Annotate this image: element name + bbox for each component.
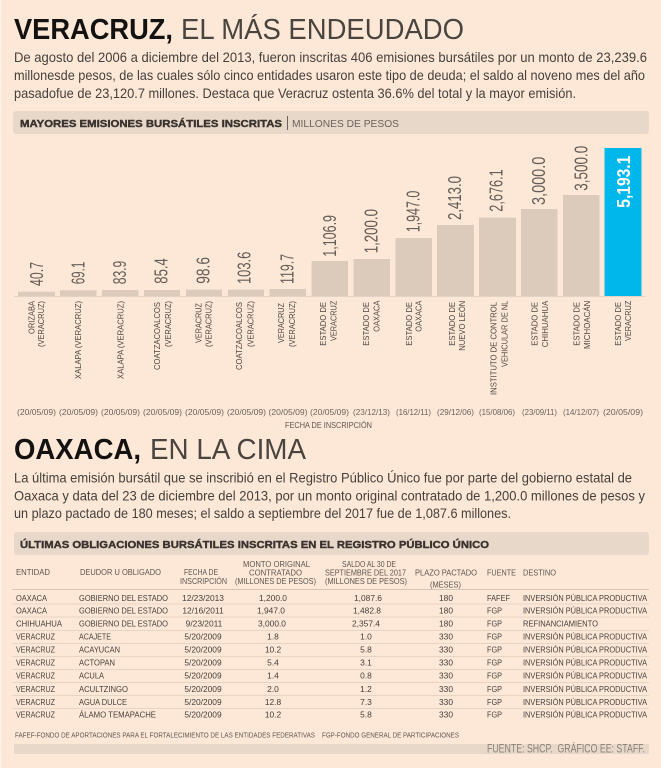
column: Estado de Oaxaca 1,200.0: ESTADO DE <box>361 302 371 346</box>
row: Oaxaca 2011: GOBIERNO DEL ESTADO <box>79 606 168 616</box>
row: Acayucan: ACAYUCAN <box>79 645 120 655</box>
row: Álamo Temapache <box>16 710 647 720</box>
row: Chihuahua: FGP <box>487 619 502 629</box>
row: Oaxaca 2013: 12/23/2013 <box>182 593 224 603</box>
chart heading band: MILLONES DE PESOS <box>292 119 399 130</box>
row: Oaxaca 2013: 180 <box>439 593 453 603</box>
row: Acula: ACULA <box>79 671 104 681</box>
row: Álamo Temapache: VERACRUZ <box>16 710 55 720</box>
column: Estado de Veracruz 1,106.9: ESTADO DE <box>318 302 328 346</box>
row: Acajete: 1.8 <box>267 632 279 642</box>
column: Estado de Oaxaca 1,200.0: (23/12/13) <box>353 407 390 417</box>
column: Veracruz 98.6 <box>185 257 224 417</box>
column: Coatzacoalcos 103.6: (20/05/09) <box>227 407 266 417</box>
row: Álamo Temapache: 5/20/2009 <box>184 710 222 720</box>
column: Estado de Veracruz 5,193.1 highlighted: (20/05/09) <box>603 407 643 417</box>
row: Oaxaca 2013: FAFEF <box>487 593 510 603</box>
row: Acayucan: 10.2 <box>265 645 281 655</box>
column: Estado de Veracruz 5,193.1 highlighted: VERACRUZ <box>623 301 633 341</box>
table header row <box>16 560 556 590</box>
row: Oaxaca 2011: OAXACA <box>16 606 47 616</box>
row: Oaxaca 2011: 12/16/2011 <box>182 606 224 616</box>
column: Veracruz 98.6: (20/05/09) <box>185 407 224 417</box>
table: obligaciones bursátiles <box>12 560 649 720</box>
column: Veracruz 98.6: (VERACRUZ) <box>204 301 214 347</box>
row: Oaxaca 2013 <box>16 593 647 603</box>
axis caption: fecha de inscripción: FECHA DE INSCRIPCIÓN <box>285 420 372 430</box>
column: Xalapa 83.9: 83.9 <box>110 261 130 284</box>
row: Agua Dulce: INVERSIÓN PÚBLICA PRODUCTIVA <box>523 697 647 707</box>
column: Estado de Chihuahua 3,000.0 <box>521 157 558 417</box>
column: Instituto de Control Vehicular de NL 2,676.1: 2,676.1 <box>487 169 507 212</box>
row: Acajete <box>16 632 647 642</box>
column: Xalapa 83.9: (20/05/09) <box>101 407 140 417</box>
table header row: CONTRATADO <box>249 568 302 578</box>
row: Álamo Temapache: INVERSIÓN PÚBLICA PRODUCTIVA <box>523 710 647 720</box>
row: Actopan: 330 <box>439 658 453 668</box>
row: Chihuahua <box>16 619 598 629</box>
column: Estado de Michoacán 3,500.0: ESTADO DE <box>572 302 582 346</box>
column: Estado de Veracruz 1,106.9: VERACRUZ <box>328 301 338 341</box>
row: Oaxaca 2011: 1,482.8 <box>353 606 381 616</box>
table header row: ENTIDAD <box>16 568 50 577</box>
row: Álamo Temapache: 5.8 <box>360 710 372 720</box>
row: Chihuahua: CHIHUAHUA <box>16 619 62 629</box>
row: Acultzingo <box>16 684 647 694</box>
column: Estado de Nuevo León 2,413.0 <box>437 176 474 417</box>
intro text block: Oaxaca <box>14 470 645 521</box>
footnote: acronyms: FGP-FONDO GENERAL DE PARTICIPACIONES <box>322 730 459 740</box>
row: Acajete: VERACRUZ <box>16 632 55 642</box>
column: Estado de Michoacán 3,500.0 <box>563 146 600 417</box>
column: Veracruz 119.7: 119.7 <box>277 254 297 284</box>
title: Oaxaca: EN LA CIMA <box>150 434 307 466</box>
table header row: DEUDOR U OBLIGADO <box>80 568 161 577</box>
column: Orizaba 40.7 <box>17 262 56 417</box>
column: Veracruz 119.7: (VERACRUZ) <box>287 301 297 347</box>
column: Instituto de Control Vehicular de NL 2,676.1: VEHICULAR DE NL <box>500 300 510 367</box>
chart heading band: MAYORES EMISIONES BURSÁTILES INSCRITAS <box>20 117 282 130</box>
row: Acajete: 5/20/2009 <box>184 632 222 642</box>
row: Agua Dulce: FGP <box>487 697 502 707</box>
column: Xalapa 69.1: (20/05/09) <box>59 407 98 417</box>
row: Oaxaca 2013: GOBIERNO DEL ESTADO <box>79 593 168 603</box>
row: Acayucan: INVERSIÓN PÚBLICA PRODUCTIVA <box>523 645 647 655</box>
row: Acultzingo: 330 <box>439 684 453 694</box>
table header row: (MILLONES DE PESOS) <box>235 577 316 586</box>
row: Oaxaca 2013: 1,087.6 <box>354 593 382 603</box>
column: Veracruz 98.6: VERACRUZ <box>194 303 204 343</box>
column: Instituto de Control Vehicular de NL 2,676.1: (15/08/06) <box>479 407 515 417</box>
column: Coatzacoalcos 85.4: COATZACOALCOS <box>152 302 162 370</box>
row: Álamo Temapache: 330 <box>439 710 453 720</box>
row: Acula: 0.8 <box>360 671 372 681</box>
row: Acajete: 330 <box>439 632 453 642</box>
row: Acayucan: 5.8 <box>360 645 372 655</box>
table header row: FUENTE <box>487 568 516 578</box>
row: Actopan: ACTOPAN <box>79 658 115 668</box>
column: Estado de Veracruz 1,106.9: 1,106.9 <box>320 215 340 257</box>
column: Xalapa 83.9 <box>101 261 140 417</box>
table header row: (MILLONES DE PESOS) <box>325 577 407 586</box>
row: Actopan: 3.1 <box>360 658 372 668</box>
row: Oaxaca 2011: INVERSIÓN PÚBLICA PRODUCTIVA <box>523 606 647 616</box>
table header row: INSCRIPCIÓN <box>180 576 227 586</box>
column: Estado de Chihuahua 3,000.0: 3,000.0 <box>529 157 549 205</box>
row: Acultzingo: 5/20/2009 <box>184 684 222 694</box>
column: Coatzacoalcos 103.6: 103.6 <box>235 252 255 284</box>
row: Actopan: INVERSIÓN PÚBLICA PRODUCTIVA <box>523 658 647 668</box>
column: Estado de Veracruz 1,106.9 <box>310 215 349 417</box>
column: Estado de Nuevo León 2,413.0: 2,413.0 <box>445 176 465 220</box>
row: Oaxaca 2011: FGP <box>487 606 502 616</box>
row: Acultzingo: 1.2 <box>360 684 372 694</box>
column: Estado de Nuevo León 2,413.0: NUEVO LEÓN <box>457 301 467 351</box>
row: Acula: 5/20/2009 <box>184 671 222 681</box>
title: Veracruz: EL MÁS ENDEUDADO <box>181 13 464 46</box>
row: Acayucan <box>16 645 647 655</box>
column: Estado de Michoacán 3,500.0: (14/12/07) <box>563 407 599 417</box>
column: Orizaba 40.7: (VERACRUZ) <box>36 301 46 347</box>
row: Actopan: 5/20/2009 <box>184 658 222 668</box>
column: Orizaba 40.7: (20/05/09) <box>17 407 56 417</box>
row: Oaxaca 2011: 180 <box>439 606 453 616</box>
column: Coatzacoalcos 103.6: (VERACRUZ) <box>246 301 256 347</box>
column: Xalapa 83.9: XALAPA (VERACRUZ) <box>116 301 126 379</box>
intro text block: Oaxaca: un plazo pactado de 180 meses; el saldo a septiembre del 2017 fue de 1,087.6 millones. <box>14 505 511 521</box>
row: Acajete: INVERSIÓN PÚBLICA PRODUCTIVA <box>523 632 647 642</box>
row: Agua Dulce: AGUA DULCE <box>79 697 127 707</box>
column: Estado de Oaxaca 1,947.0: OAXACA <box>414 300 424 332</box>
row: Agua Dulce: 330 <box>439 697 453 707</box>
chart heading band <box>13 111 649 134</box>
row: Chihuahua: 3,000.0 <box>258 619 286 629</box>
column: Estado de Oaxaca 1,200.0: OAXACA <box>371 300 381 332</box>
row: Álamo Temapache: ÁLAMO TEMAPACHE <box>79 710 156 720</box>
title: Veracruz: VERACRUZ, <box>14 14 173 46</box>
title: Oaxaca: OAXACA, <box>14 434 141 466</box>
row: Acayucan: 330 <box>439 645 453 655</box>
row: Oaxaca 2011: 1,947.0 <box>257 606 285 616</box>
column: Coatzacoalcos 85.4: 85.4 <box>152 258 172 284</box>
column: Instituto de Control Vehicular de NL 2,676.1 <box>479 169 516 417</box>
column: Estado de Oaxaca 1,947.0: 1,947.0 <box>403 191 423 232</box>
row: Acultzingo: ACULTZINGO <box>79 684 129 694</box>
table header row: PLAZO PACTADO <box>415 568 477 578</box>
column: Estado de Chihuahua 3,000.0: (23/09/11) <box>522 407 557 417</box>
row: Álamo Temapache: 10.2 <box>265 710 281 720</box>
column: Estado de Michoacán 3,500.0: 3,500.0 <box>571 146 591 191</box>
table heading band <box>14 532 649 555</box>
row: Acultzingo: FGP <box>487 684 502 694</box>
row: Chihuahua: 9/23/2011 <box>186 619 223 629</box>
row: Oaxaca 2013: INVERSIÓN PÚBLICA PRODUCTIVA <box>523 593 647 603</box>
column: Veracruz 119.7: (20/05/09) <box>268 407 308 417</box>
table heading band: ÚLTIMAS OBLIGACIONES BURSÁTILES INSCRITAS EN EL REGISTRO PÚBLICO ÚNICO <box>20 538 489 551</box>
column: Veracruz 119.7 <box>268 254 308 417</box>
row: Acula: VERACRUZ <box>16 671 55 681</box>
column: Xalapa 69.1: XALAPA (VERACRUZ) <box>73 301 83 379</box>
row: Acajete: ACAJETE <box>79 632 111 642</box>
column: Veracruz 98.6: 98.6 <box>193 257 213 284</box>
column: Estado de Chihuahua 3,000.0: ESTADO DE <box>530 302 540 346</box>
bar chart: mayores emisiones <box>14 146 645 417</box>
row: Chihuahua: 180 <box>439 619 453 629</box>
column: Estado de Oaxaca 1,947.0 <box>396 191 432 417</box>
row: Agua Dulce: VERACRUZ <box>16 697 55 707</box>
row: Chihuahua: GOBIERNO DEL ESTADO <box>79 619 168 629</box>
column: Instituto de Control Vehicular de NL 2,676.1: INSTITUTO DE CONTROL <box>488 302 498 395</box>
column: Orizaba 40.7: ORIZABA <box>26 301 36 334</box>
row: Actopan <box>16 658 647 668</box>
row: Acula: INVERSIÓN PÚBLICA PRODUCTIVA <box>523 671 647 681</box>
row: Acayucan: 5/20/2009 <box>184 645 222 655</box>
row: Agua Dulce <box>16 697 647 707</box>
source band <box>14 742 649 756</box>
row: Acajete: FGP <box>487 632 502 642</box>
row: Acultzingo: INVERSIÓN PÚBLICA PRODUCTIVA <box>523 684 647 694</box>
row: Acajete: 1.0 <box>360 632 372 642</box>
table header row: FECHA DE <box>184 568 218 577</box>
column: Estado de Veracruz 5,193.1 highlighted: 5,193.1 <box>614 156 634 208</box>
column: Estado de Veracruz 5,193.1 highlighted <box>603 148 643 417</box>
row: Chihuahua: 2,357.4 <box>352 619 380 629</box>
column: Estado de Nuevo León 2,413.0: ESTADO DE <box>447 302 457 346</box>
row: Acultzingo: VERACRUZ <box>16 684 55 694</box>
row: Agua Dulce: 5/20/2009 <box>184 697 222 707</box>
column: Estado de Oaxaca 1,200.0: 1,200.0 <box>361 209 381 253</box>
table header row: SEPTIEMBRE DEL 2017 <box>325 568 406 578</box>
column: Estado de Michoacán 3,500.0: MICHOACÁN <box>582 301 592 349</box>
row: Agua Dulce: 12.8 <box>265 697 281 707</box>
row: Acula: 1.4 <box>267 671 279 681</box>
column: Coatzacoalcos 85.4: (20/05/09) <box>143 407 182 417</box>
row: Chihuahua: REFINANCIAMIENTO <box>523 619 598 629</box>
row: Acayucan: FGP <box>487 645 502 655</box>
footnote: acronyms: FAFEF-FONDO DE APORTACIONES PARA EL FORTALECIMIENTO DE LAS ENTIDADES FEDERATIVAS <box>15 730 315 740</box>
row: Actopan: 5.4 <box>267 658 279 668</box>
column: Coatzacoalcos 103.6 <box>227 252 266 417</box>
row: Actopan: FGP <box>487 658 502 668</box>
row: Álamo Temapache: FGP <box>487 710 502 720</box>
title: Veracruz <box>14 13 464 46</box>
column: Orizaba 40.7: 40.7 <box>27 262 47 286</box>
row: Acula: 330 <box>439 671 453 681</box>
table header row: MONTO ORIGINAL <box>243 560 310 569</box>
row: Oaxaca 2011 <box>16 606 647 616</box>
column: Estado de Oaxaca 1,947.0: ESTADO DE <box>404 302 414 346</box>
column: Estado de Oaxaca 1,200.0 <box>353 209 390 417</box>
row: Acayucan: VERACRUZ <box>16 645 55 655</box>
row: Oaxaca 2013: 1,200.0 <box>259 593 287 603</box>
column: Estado de Veracruz 5,193.1 highlighted: ESTADO DE <box>613 302 623 346</box>
table header row: DESTINO <box>523 568 556 578</box>
row: Actopan: VERACRUZ <box>16 658 55 668</box>
column: Coatzacoalcos 85.4: (VERACRUZ) <box>163 301 173 347</box>
row: Agua Dulce: 7.3 <box>360 697 372 707</box>
title: Oaxaca <box>14 434 307 466</box>
column: Coatzacoalcos 103.6: COATZACOALCOS <box>234 302 244 370</box>
column: Veracruz 119.7: VERACRUZ <box>276 303 286 343</box>
row: Acultzingo: 2.0 <box>267 684 279 694</box>
column: Estado de Oaxaca 1,947.0: (16/12/11) <box>396 407 431 417</box>
row: Acula: FGP <box>487 671 502 681</box>
intro text block: Veracruz: pasadofue de 23,120.7 millones. Destaca que Veracruz ostenta 36.6% del total y la mayor emisión. <box>14 85 576 101</box>
table header row: (MESES) <box>430 580 461 590</box>
row: Acula <box>16 671 647 681</box>
column: Estado de Chihuahua 3,000.0: CHIHUAHUA <box>540 300 550 347</box>
intro text block: Veracruz <box>14 49 647 101</box>
column: Xalapa 69.1: 69.1 <box>68 262 88 284</box>
column: Estado de Veracruz 1,106.9: (20/05/09) <box>310 407 349 417</box>
column: Coatzacoalcos 85.4 <box>143 258 182 417</box>
table header row: SALDO AL 30 DE <box>342 560 396 569</box>
column: Estado de Nuevo León 2,413.0: (29/12/06) <box>437 407 474 417</box>
column: Xalapa 69.1 <box>59 262 98 417</box>
row: Oaxaca 2013: OAXACA <box>16 593 47 603</box>
